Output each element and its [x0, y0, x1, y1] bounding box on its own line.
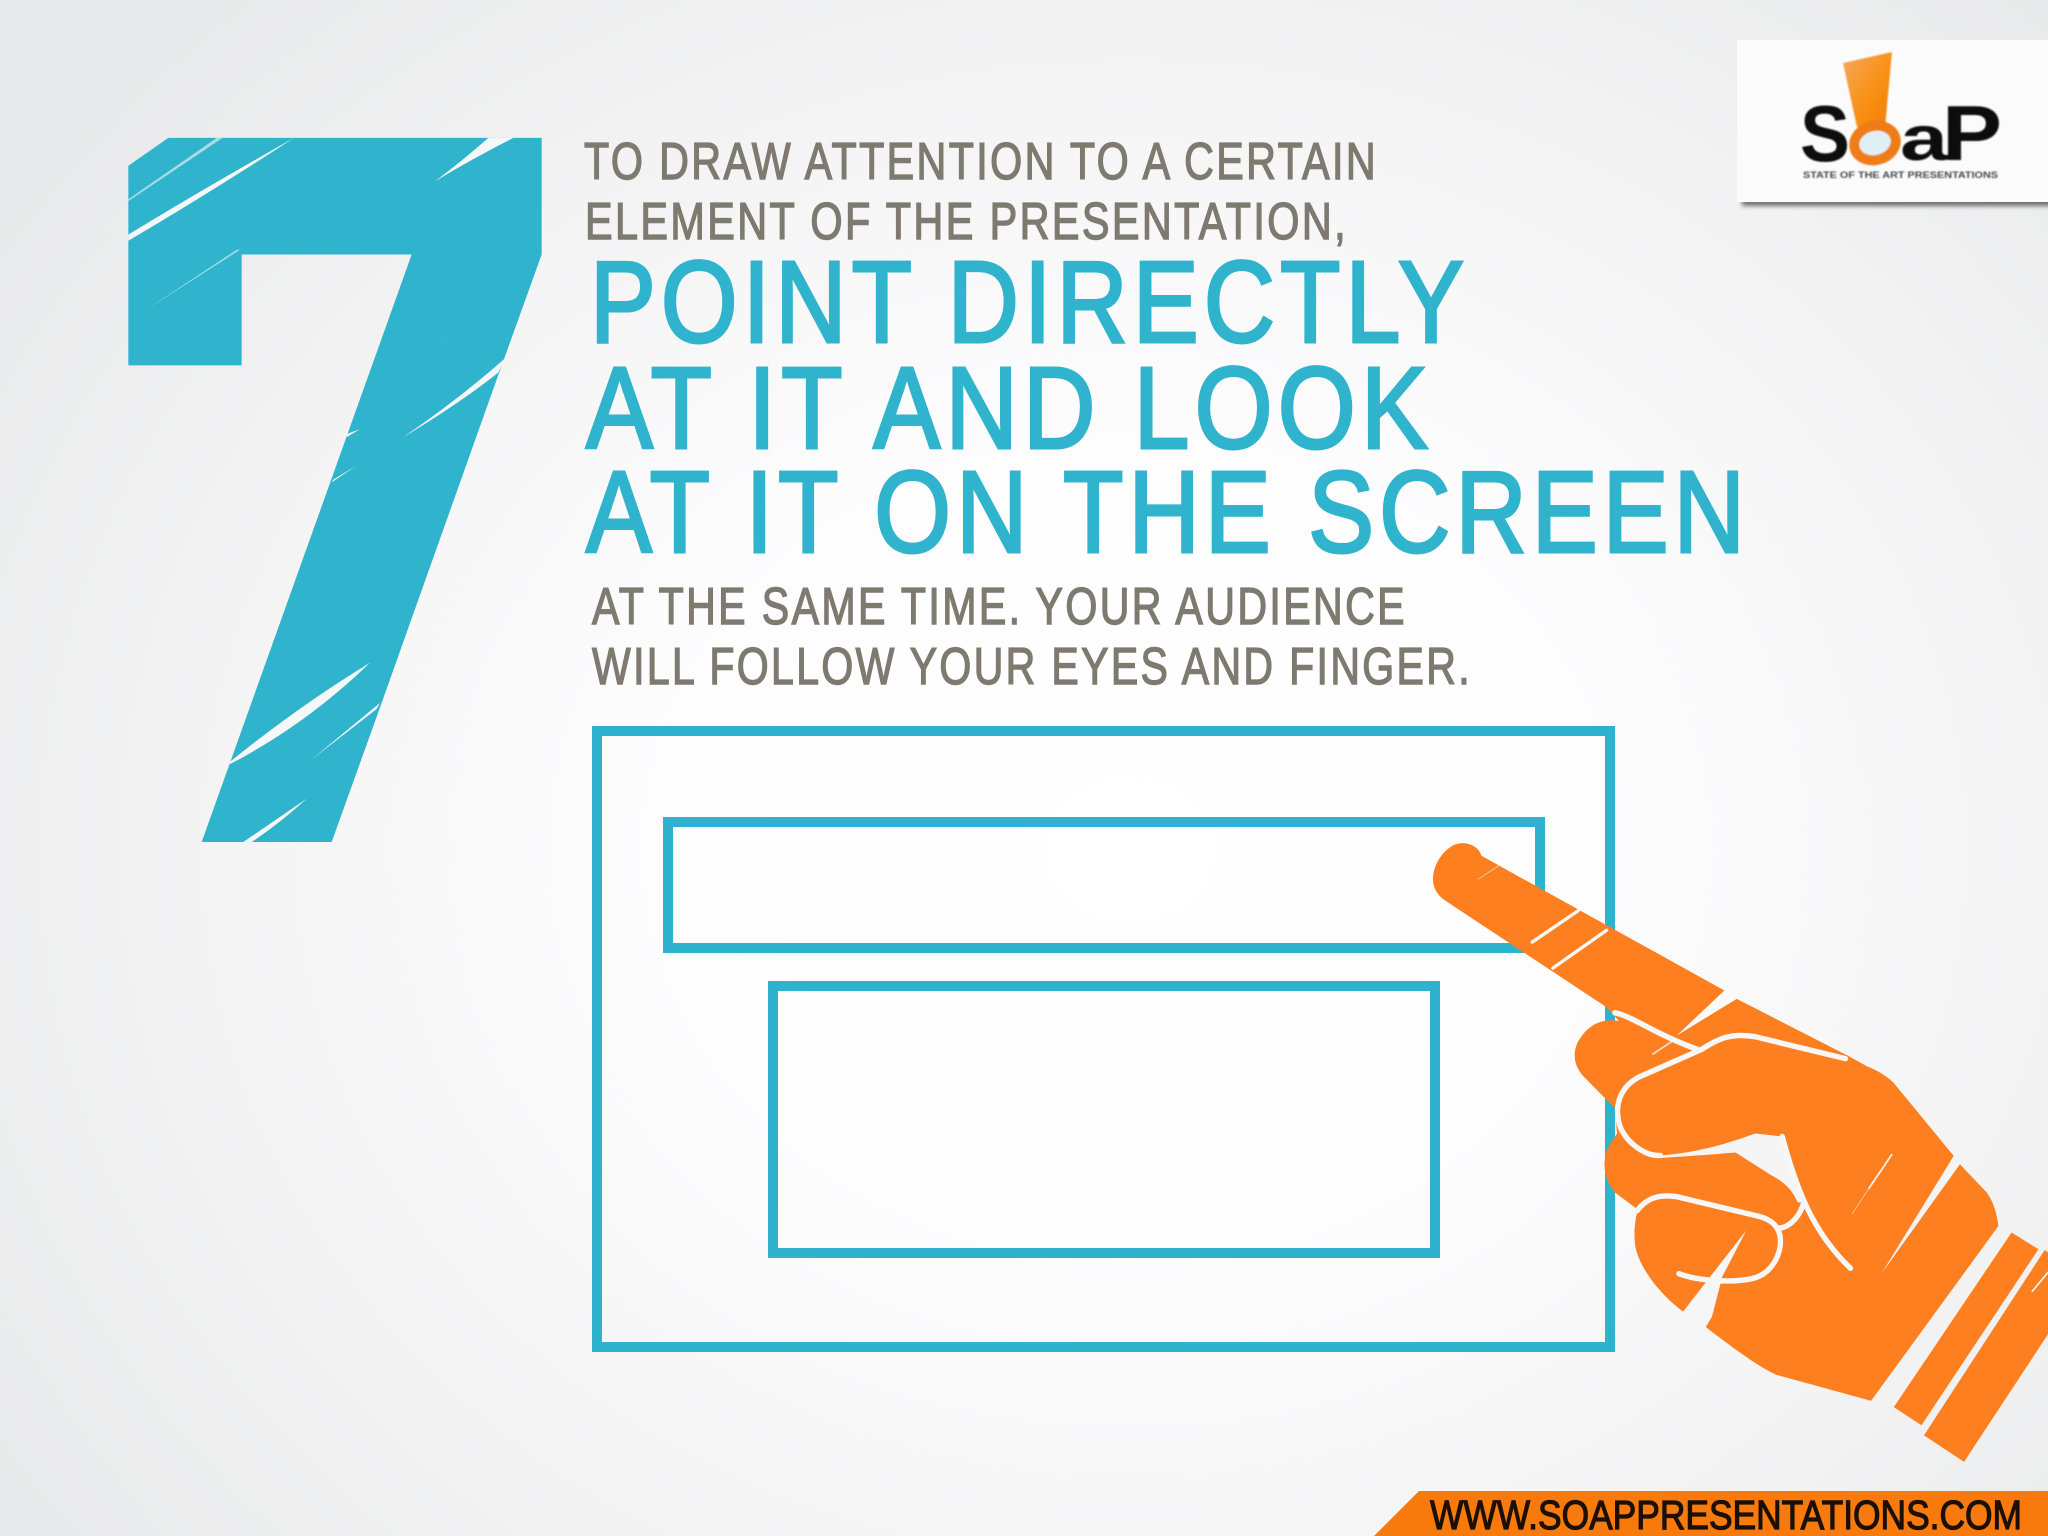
- card background: [1737, 40, 2048, 202]
- pointing hand: [1433, 843, 2048, 1462]
- headline line 2: AT IT AND LOOK: [586, 343, 1433, 473]
- logo tagline: STATE OF THE ART PRESENTATIONS: [1803, 170, 1998, 180]
- finger outlines: [1479, 865, 2048, 1291]
- lower content box: [773, 986, 1435, 1253]
- big number 7: [128, 138, 542, 842]
- closing line 1: AT THE SAME TIME. YOUR AUDIENCE: [592, 578, 1407, 636]
- logo card: [1737, 40, 2048, 206]
- logo artwork: [1800, 52, 2002, 180]
- closing line 2: WILL FOLLOW YOUR EYES AND FINGER.: [592, 638, 1472, 696]
- footer background: [1374, 1491, 2048, 1536]
- wrist band one: [1894, 1232, 2038, 1425]
- logo letter P: P: [1942, 89, 2002, 177]
- logo mark: orange ring: [1850, 121, 1900, 165]
- logo mark: exclamation: [1843, 52, 1892, 127]
- headline: [586, 237, 1750, 577]
- numeral shape: [128, 138, 542, 842]
- card shadow: [1742, 198, 2048, 206]
- screen frame: [597, 731, 1610, 1347]
- wrist band two: [1924, 1250, 2048, 1462]
- intro text: [584, 133, 1378, 251]
- logo letter S: S: [1800, 89, 1850, 178]
- footer banner: [1374, 1491, 2048, 1536]
- intro line 1: TO DRAW ATTENTION TO A CERTAIN: [584, 133, 1378, 191]
- hand silhouette: [1433, 843, 1998, 1401]
- closing text: [592, 578, 1472, 696]
- intro line 2: ELEMENT OF THE PRESENTATION,: [585, 193, 1348, 251]
- gap between fingers: [1660, 1134, 1803, 1203]
- presentation screen illustration: [597, 731, 1610, 1347]
- top content box: [668, 822, 1540, 948]
- scratches on numeral: [128, 138, 513, 842]
- headline line 3: AT IT ON THE SCREEN: [586, 447, 1750, 577]
- logo letter a: a: [1900, 104, 1949, 174]
- headline line 1: POINT DIRECTLY: [590, 237, 1469, 367]
